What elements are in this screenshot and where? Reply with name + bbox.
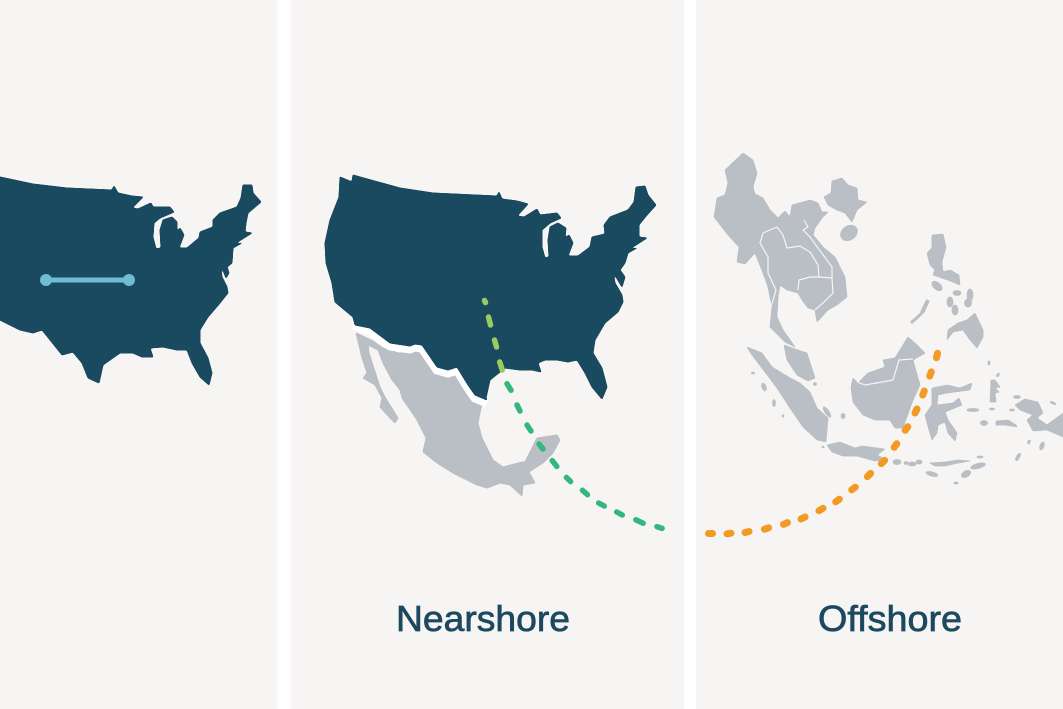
Luzon bbox=[927, 234, 960, 285]
Borneo bbox=[851, 337, 925, 428]
small islands bbox=[752, 361, 1056, 484]
heading: Offshore: Offshore bbox=[818, 598, 962, 639]
Malay Peninsula bbox=[784, 345, 815, 381]
panel: onshore bbox=[0, 0, 277, 709]
Java bbox=[827, 442, 887, 461]
Mindanao bbox=[947, 313, 983, 348]
Sulawesi bbox=[925, 383, 972, 441]
map: United States (cropped) bbox=[0, 172, 261, 385]
heading: Nearshore: Nearshore bbox=[396, 598, 570, 639]
map: United States bbox=[325, 175, 656, 403]
central Philippines islands bbox=[911, 279, 973, 323]
Halmahera bbox=[990, 380, 1000, 402]
route: offshore dashed arc bbox=[708, 353, 938, 534]
mainland Southeast Asia bbox=[714, 153, 847, 347]
connector: domestic route bbox=[40, 274, 135, 286]
panel: offshore bbox=[696, 0, 1063, 709]
map: internal borders bbox=[760, 220, 913, 385]
panel: nearshore bbox=[291, 0, 684, 709]
map: Mexico bbox=[356, 333, 560, 496]
Hainan bbox=[838, 222, 860, 244]
south China coast bbox=[824, 178, 867, 222]
New Guinea bbox=[1015, 399, 1063, 440]
route: nearshore dashed arc bbox=[484, 300, 662, 528]
Sumatra bbox=[747, 347, 828, 442]
map: Southeast Asia bbox=[714, 153, 1063, 484]
